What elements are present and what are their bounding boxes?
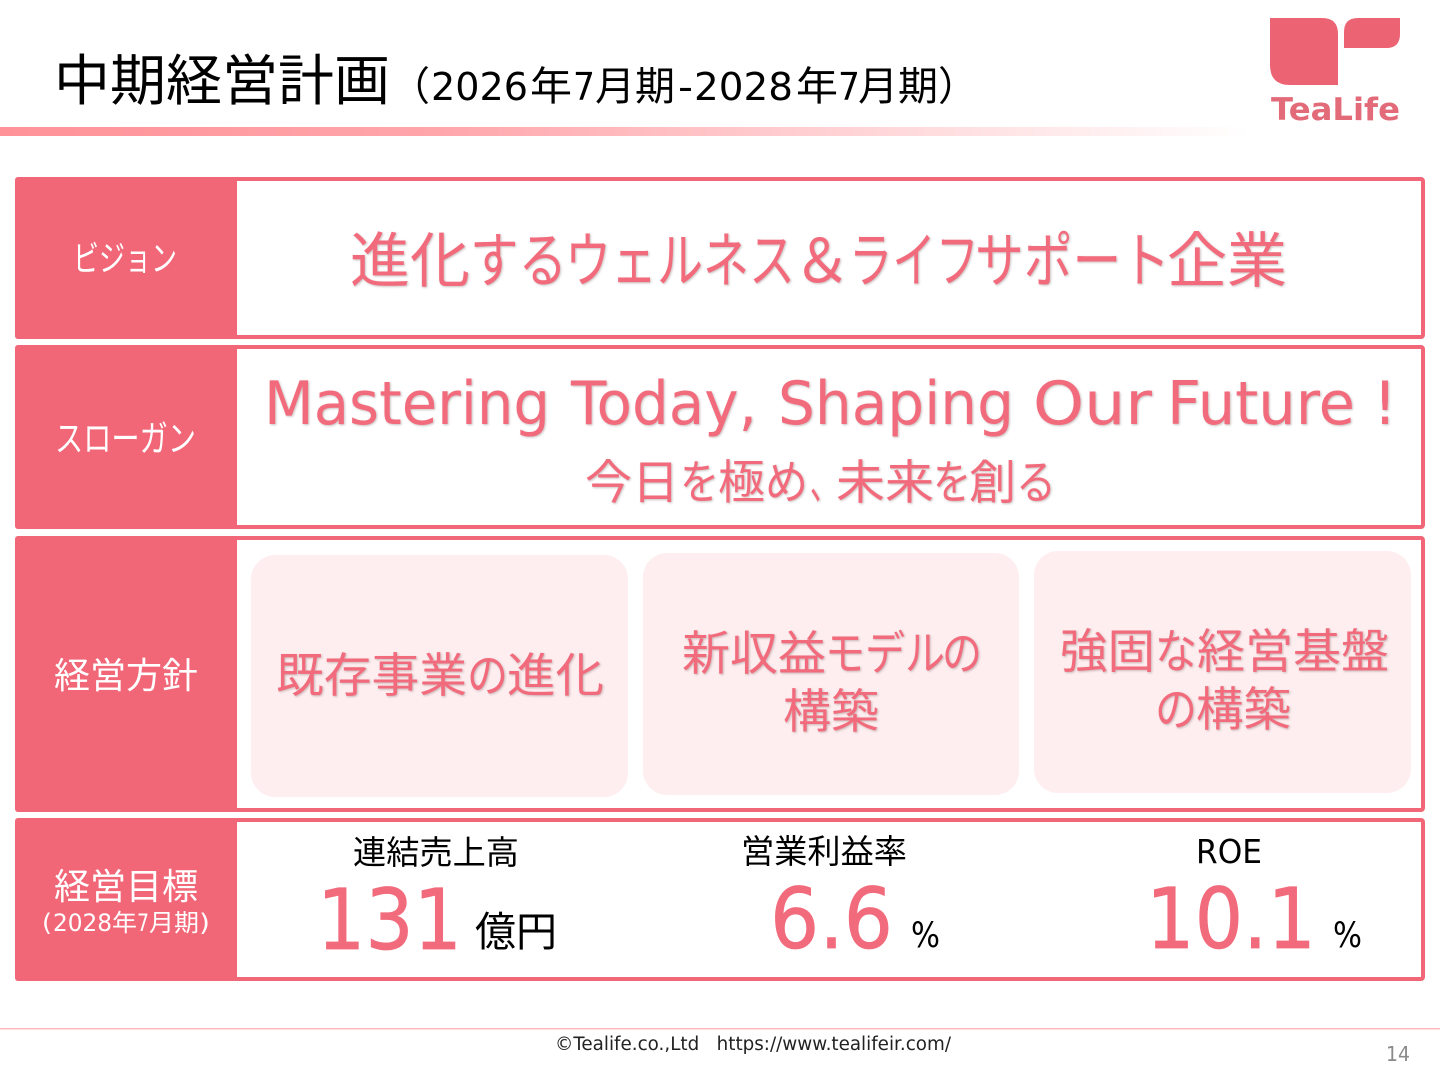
panel: vision [15,177,1423,339]
target: consolidated sales: 億円 [475,898,557,958]
targets label: 月期 [149,903,199,938]
title: 中期経営計画 [54,36,390,116]
target: ROE: % [1333,916,1362,956]
slogan japanese: 創 [969,444,1016,513]
title: （ [390,54,430,112]
icon: TeaLife logo: TeaLife [1271,92,1400,128]
policy card 3: な [1155,613,1197,682]
policy card 3 [1034,551,1411,793]
slogan japanese: 極 [718,444,765,513]
slogan japanese: る [1016,444,1056,513]
vision statement: ライフ [849,213,979,300]
title: 2026 [431,65,528,109]
title: 年 [530,54,572,112]
targets label [15,818,237,981]
slogan japanese: を [680,444,719,513]
targets label: 7 [137,909,149,937]
policy card 3: 構築 [1196,671,1291,740]
slogan japanese: 未来 [836,444,934,513]
policy label [15,536,237,812]
vision statement: 企業 [1167,213,1287,300]
policy card 2: モデル [825,615,945,684]
policy card 1: 進化 [507,637,604,706]
policy card 2: 新収益 [682,615,826,684]
vision statement: する [470,213,567,300]
footer copyright and url: ©Tealife.co.,Ltd https://www.tealifeir.com/ [555,1034,952,1055]
policy card 1 [251,555,628,797]
title: - [678,65,693,109]
targets label: 年 [112,903,137,938]
slogan english: Today, [570,369,757,439]
page number: 14 [1386,1042,1410,1066]
slogan english: Mastering [264,369,550,439]
title: 2028 [694,65,793,109]
target: ROE: ROE [1196,832,1262,871]
vision statement: 進化 [350,213,470,300]
slogan english: Our [1033,369,1152,439]
policy card 3: 強固 [1060,613,1155,682]
slogan japanese [585,444,1056,513]
slogan japanese: め [765,444,808,513]
vision statement: サポート [975,213,1170,300]
vision statement [350,213,1287,300]
vision label [15,177,237,339]
vision statement: ＆ [793,213,851,300]
title: 月期 [595,54,675,112]
policy card 3: の [1155,671,1197,740]
slogan english [264,369,1397,439]
slogan japanese: 、 [810,444,838,513]
title: ） [938,54,978,112]
footer line [0,1028,1440,1030]
targets label: ) [199,909,210,937]
policy card 2: 構築 [783,673,879,742]
slogan japanese: を [933,444,971,513]
policy card 2: の [942,615,982,684]
policy label: 経営方針 [54,647,198,699]
title underline gradient bar [0,127,1250,136]
slogan english: Shaping [778,369,1014,439]
policy card 1: の [467,637,508,706]
vision label: ビジョン [73,231,177,282]
panel: management targets [15,818,1423,981]
target: consolidated sales: 連結売上高 [353,826,519,874]
slogan english: ! [1373,369,1397,439]
target: operating margin: % [911,916,940,956]
targets label: 経営目標 [54,858,198,910]
policy card 1: 既存事業 [276,637,467,706]
vision statement: ウェルネス [565,213,795,300]
target: consolidated sales [317,826,557,969]
title: 7 [573,65,595,109]
title: 月期 [858,54,938,112]
title: 年 [796,54,838,112]
panel: slogan [15,345,1423,529]
policy card 2 [643,553,1019,795]
target: consolidated sales: 131 [317,871,462,969]
target: ROE: 10.1 [1146,870,1316,968]
policy card 3: 経営基盤 [1197,613,1389,682]
slogan japanese: 今日 [585,444,679,513]
panel: management policy [15,536,1423,812]
target: operating margin: 6.6 [770,870,893,968]
title: 7 [838,65,860,109]
slogan english: Future [1167,369,1355,439]
target: operating margin [741,825,940,968]
icon: TeaLife logo [1270,18,1400,128]
targets label: ( [42,909,52,937]
slogan label: スローガン [55,410,196,462]
target: operating margin: 営業利益率 [741,825,907,873]
target: ROE [1146,832,1362,968]
slogan label [15,345,237,529]
title [54,36,978,116]
targets label: 2028 [53,909,112,937]
